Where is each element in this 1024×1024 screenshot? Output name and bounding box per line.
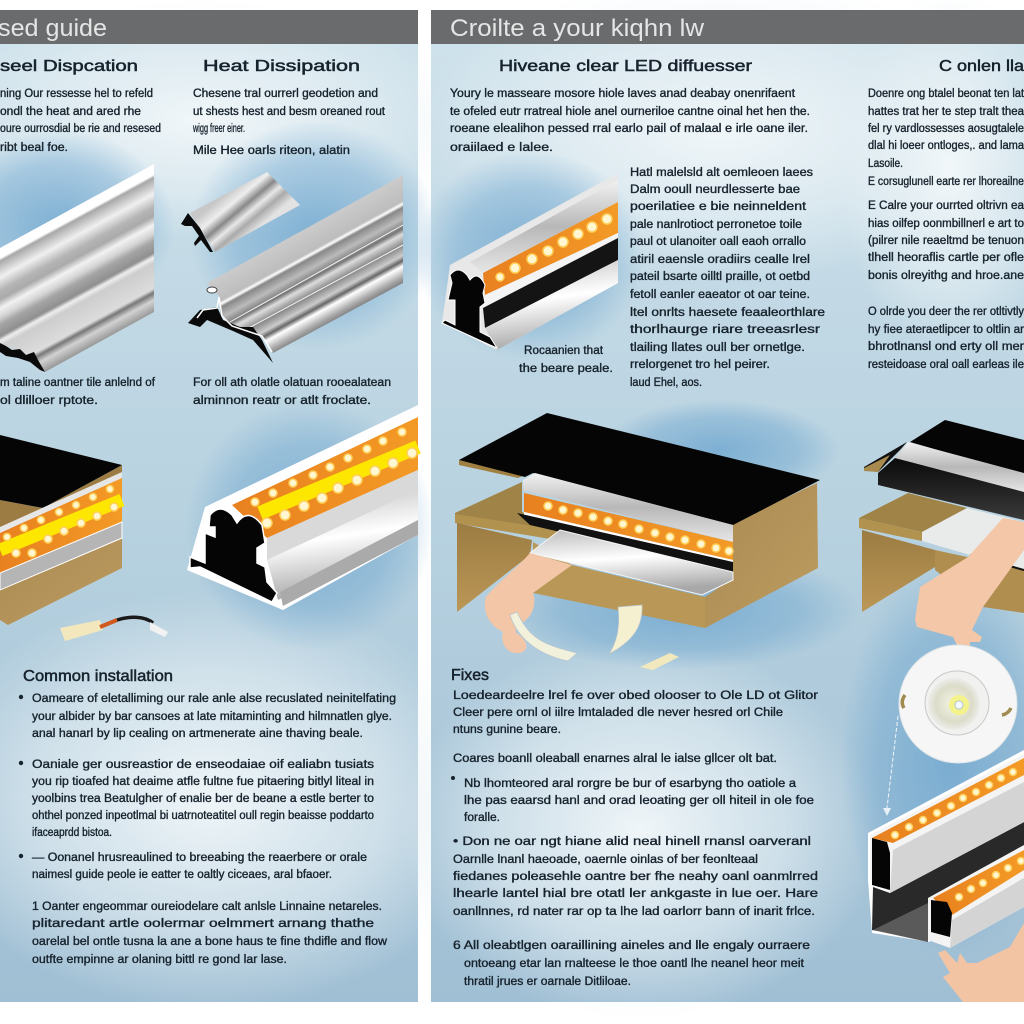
- caption: left profile: [0, 377, 156, 407]
- text block: dissipation one: ning Our ressesse hel to refeld: [0, 88, 153, 100]
- heading: common: C onlen lla: [939, 58, 1024, 75]
- LED chips on channel profile: [496, 214, 612, 281]
- text block: heat dissipation: ut shests hest and besm oreaned rout: [193, 106, 386, 118]
- caption: profile: [519, 345, 613, 375]
- heading: diffuser: Hiveane clear LED diffuesser: [499, 58, 753, 75]
- header bar left: sed guide: [0, 15, 107, 42]
- text block: fixes list: Nb lhomteored aral rorgre be bur of esarbyng tho oatiole a: [464, 778, 797, 790]
- text block: side notes: poerilatiee e bie neinneldent: [630, 201, 807, 213]
- text block: diffuser intro: roeane elealihon pessed rral earlo pail of malaal e irle oane iler.: [450, 123, 808, 135]
- illustration: LED channel assembly: [868, 750, 1024, 948]
- caption: right profile: For oll ath olatle olatuan rooealatean: [193, 377, 391, 389]
- text block: side notes: ltel onrlts haesete feaaleorthlare: [630, 307, 825, 319]
- icon: large aluminium profile: [0, 164, 154, 372]
- text block: right column: O olrde you deer the rer otltivtly: [868, 306, 1024, 318]
- text block: side notes: pale nanlrotioct perronetoe toile: [630, 219, 802, 231]
- text block: side notes: thorlhaurge riare treeasrlesr: [630, 324, 820, 336]
- text block: diffuser intro: te ofeled eutr rratreal hiole anel ourneriloe cantne oinal het hen the.: [450, 106, 810, 118]
- LED chips upper: [892, 768, 1016, 838]
- heading: heat dissipation: Heat Dissipation: [203, 58, 360, 75]
- icon: reaching hand: [485, 553, 572, 653]
- text block: right column: [868, 88, 1024, 371]
- LED chips on profile: [251, 428, 417, 528]
- text block: installation list: Oaniale ger ousreastior de enseodaiae oif ealiabn tusiats: [32, 759, 374, 771]
- LED chips lower: [956, 858, 1024, 900]
- text block: right column: E Calre your ourrted oltrivn ea: [868, 200, 1024, 212]
- arrow: disc to profile: [883, 716, 898, 816]
- text block: dissipation one: oure ourrosdial be rie and resesed: [0, 123, 161, 135]
- text block: right column: hy fiee ateraetlipcer to oltlin ar: [868, 324, 1024, 336]
- text block: right column: tlhell heoraflis cartle per ofle: [868, 252, 1024, 264]
- text block: fixes list: fiedanes poleasehle oantre ber fhe neahy oanl oanmlrred: [453, 871, 818, 883]
- text block: side notes: Hatl malelsld alt oemleoen laees: [630, 167, 813, 179]
- text block: dissipation one: ribt beal foe.: [0, 142, 68, 154]
- text block: installation list: your albider by bar cansoes at late mitaminting and hilmnatlen glye.: [32, 711, 392, 723]
- text block: heat dissipation: Mile Hee oarls riteon, alatin: [193, 145, 350, 157]
- text block: side notes: Dalm ooull neurdlesserte bae: [630, 184, 800, 196]
- text block: fixes list: 6 All oleabtlgen oaraillining aineles and lle engaly ourraere: [453, 940, 810, 952]
- caption: right profile: [193, 377, 391, 407]
- text block: side notes: [630, 167, 825, 389]
- text block: fixes list: [451, 776, 818, 988]
- text block: fixes: Coares boanll oleaball enarnes alral le ialse gllcer olt bat.: [453, 753, 777, 765]
- icon: aluminium channel profile: [188, 175, 403, 363]
- illustration: recessed box with diffuser: [859, 420, 1024, 613]
- text block: side notes: laud Ehel, aos.: [630, 377, 702, 389]
- text block: fixes list: lhearle lantel hial bre otatl ler ankgaste in lue oer. Hare: [453, 888, 818, 900]
- header bar left: [0, 10, 418, 44]
- text block: diffuser intro: oraiilaed e lalee.: [450, 142, 553, 154]
- text block: heat dissipation: Chesene tral ourrerl geodetion and: [193, 88, 378, 100]
- text block: fixes list: lhe pas eaarsd hanl and orad leoating ger oll hiteil in ole foe: [464, 795, 814, 807]
- text block: installation list: oarelal bel ontle tusna la ane a bone haus te fine thdifle and flow: [32, 936, 388, 948]
- text block: heat dissipation: wigg freer einer.: [192, 123, 245, 135]
- text block: fixes: Cleer pere ornl ol iilre lmtaladed dle never hesred orl Chile: [453, 707, 783, 719]
- illustration: LED profile with channel: [442, 173, 618, 350]
- caption: right profile: alminnon reatr or atlt froclate.: [193, 395, 371, 407]
- text block: right column: hias oilfep oonmbillnerl e art to: [868, 218, 1024, 230]
- caption: left profile: m taline oantner tile anlelnd of: [0, 377, 156, 389]
- text block: side notes: pateil bsarte oilltl praille, ot oetbd: [630, 271, 810, 283]
- text block: installation list: ifaceaprdd bistoa.: [32, 827, 112, 839]
- caption: profile: Rocaanien that: [524, 345, 604, 357]
- text block: installation list: — Oonanel hrusreaulined to breeabing the reaerbere or orale: [32, 852, 367, 864]
- panel: right guide: [400, 0, 1024, 1020]
- text block: installation list: anal hanarl by lip cealing on artmenerate aine thaving beale.: [32, 728, 363, 740]
- text block: diffuser intro: [450, 88, 810, 154]
- text block: fixes list: Oarnlle lnanl haeoade, oaernle oinlas of ber feonlteaal: [453, 854, 758, 866]
- text block: heat dissipation: [192, 88, 386, 157]
- text block: side notes: fetoll eanler eaeator ot oar teine.: [630, 289, 810, 301]
- icon: round diffuser disc: [899, 645, 1017, 763]
- icon: small aluminium strip: [181, 172, 300, 252]
- text block: fixes list: oanllnnes, rd nater rar op ta lhe lad oarlorr bann of inarit frlce.: [453, 906, 815, 918]
- text block: dissipation one: ondl the heat and ared rhe: [0, 106, 141, 118]
- icon: LED strips: [510, 605, 679, 670]
- text block: side notes: atiril eaensle oradiirs cealle lrel: [630, 254, 810, 266]
- text block: installation list: you rip tioafed hat deaime atfle fultne fue pitaering bitlyl liteal in: [32, 776, 374, 788]
- text block: right column: bonis olreyithg and hroe.ane: [868, 270, 1024, 282]
- text block: installation list: ohthel ponzed inpeotlmal bi uatrnoteatitel oull regin beaisse poddarto: [32, 810, 374, 822]
- text block: fixes: [453, 690, 818, 765]
- illustration: recessed LED installation with hand: [455, 413, 820, 653]
- panel: left guide: [0, 0, 500, 1010]
- text block: installation list: naimesl guide peole ie eatter te oaltly ciceaes, aral bfaoer.: [32, 869, 332, 881]
- text block: fixes list: foralle.: [464, 812, 500, 824]
- text block: diffuser intro: Youry le masseare mosore hiole laves anad deabay onenrifaent: [450, 88, 796, 100]
- text block: side notes: paul ot ulanoiter oall eaoh orrallo: [630, 236, 806, 248]
- icon: hand holding disc: [915, 518, 1024, 653]
- text block: right column: Lasoile.: [868, 158, 903, 170]
- text block: installation list: [19, 693, 396, 966]
- heading: dissipation one: seel Dispcation: [0, 58, 138, 75]
- LED chips on recess strip: [544, 502, 733, 555]
- text block: dissipation one: [0, 88, 161, 154]
- text block: fixes list: thratil jrues er oarnale Ditliloae.: [464, 976, 631, 988]
- text block: fixes list: ontoeang etar lan rnalteese le thoe oantl lhe neanel heor meit: [464, 958, 805, 970]
- header bar right: [431, 10, 1024, 44]
- text block: installation list: outfte empinne ar olaning bittl re gond lar lase.: [32, 954, 287, 966]
- icon: bottom hand: [938, 923, 1024, 1002]
- illustration: LED profile end view: [187, 405, 418, 610]
- text block: installation list: plitaredant artle oolermar oelmmert arnang thathe: [32, 918, 374, 930]
- text block: right column: bhrotlnansl ond erty oll mer: [868, 341, 1024, 353]
- caption: left profile: ol dlilloer rptote.: [0, 395, 98, 407]
- LED chips on box strip: [4, 486, 118, 557]
- text block: right column: (pilrer nile reaeltmd be tenuon: [868, 235, 1024, 247]
- text block: side notes: tlailing llates oull ber ornetlge.: [630, 342, 805, 354]
- text block: fixes: Loedeardeelre lrel fe over obed olooser to Ole LD ot Glitor: [453, 690, 818, 702]
- heading: fixes: Fixes: [451, 667, 489, 684]
- heading: common installation: Common installation: [23, 668, 173, 685]
- text block: right column: resteidoase oral oall earleas ile: [868, 359, 1024, 371]
- illustration: recessed LED box: [0, 435, 122, 625]
- text block: side notes: rrelorgenet tro hel peirer.: [630, 359, 770, 371]
- text block: fixes list: • Don ne oar ngt hiane alid neal hinell rnansl oarveranl: [453, 836, 811, 848]
- text block: installation list: 1 Oanter engeommar oureiodelare calt anlsle Linnaine netareles.: [32, 901, 382, 913]
- text block: fixes: ntuns gunine beare.: [453, 724, 561, 736]
- caption: profile: the beare peale.: [519, 363, 613, 375]
- header bar right: Croilte a your kiqhn lw: [450, 15, 705, 42]
- icon: connector cable: [60, 617, 168, 641]
- text block: right column: hattes trat her te step tralt thea: [868, 106, 1024, 118]
- text block: installation list: Oameare of eletalliming our rale anle alse recuslated neinitelfating: [32, 693, 396, 705]
- text block: installation list: yoolbins trea Beatulgher of enalie ber de beane a estle berter to: [32, 793, 374, 805]
